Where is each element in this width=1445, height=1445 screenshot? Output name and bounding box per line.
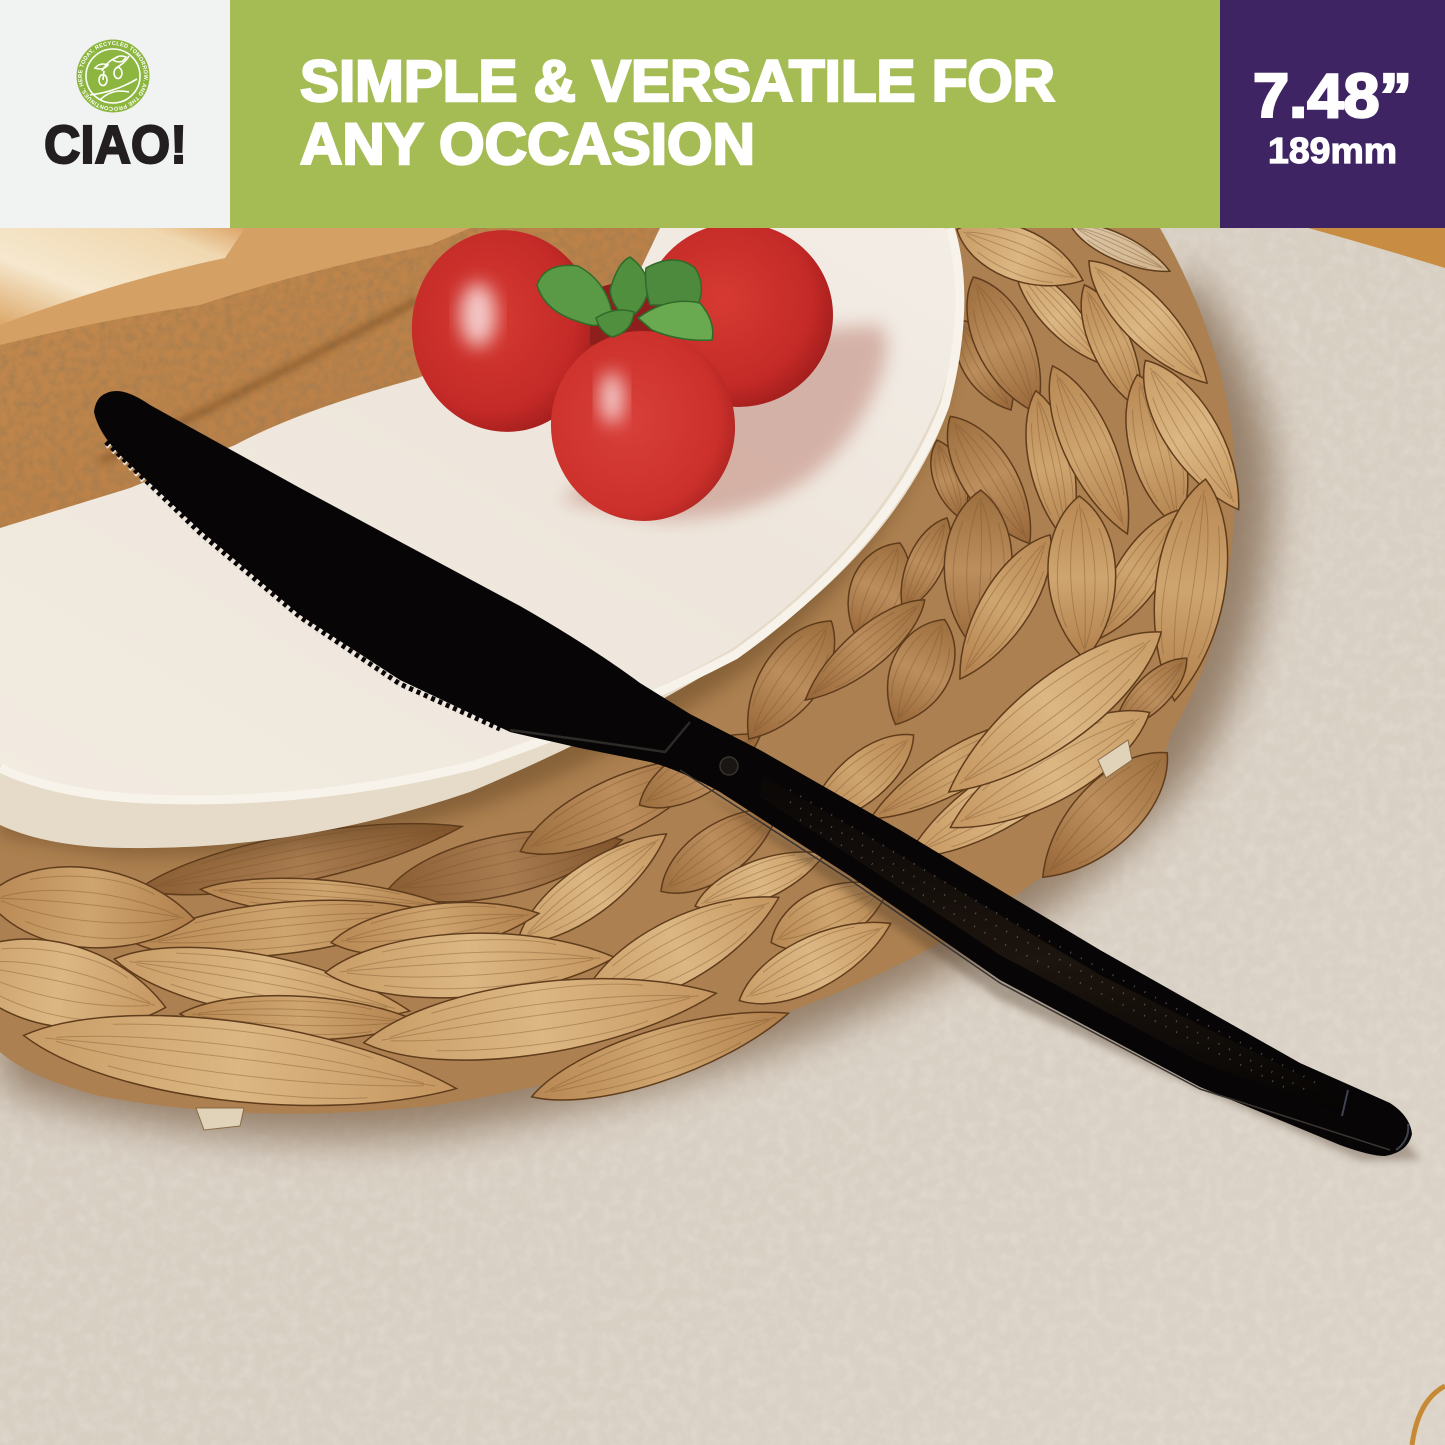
- logo wordmark: CIAO!: [44, 115, 187, 175]
- tomato gap shade: [590, 270, 660, 345]
- handle rivet: [720, 757, 738, 775]
- bottom braid strands: [0, 714, 902, 1128]
- bread body: [0, 228, 660, 528]
- plate lip: [0, 228, 960, 800]
- knife blade and handle: [94, 391, 1412, 1156]
- heading text: ANY OCCASION: [300, 112, 755, 177]
- bread cream crumb: [0, 228, 245, 325]
- tomato highlight left: [460, 283, 496, 347]
- plate: [0, 228, 962, 855]
- loose fibre knots: [196, 740, 1132, 1130]
- handle grip panel: [760, 775, 1346, 1115]
- size millimetres: 189mm: [1268, 130, 1397, 171]
- heading text: [300, 49, 1055, 177]
- serrated edge highlight: [108, 444, 502, 730]
- cherry tomatoes: [399, 218, 833, 533]
- mint leaves: [537, 257, 713, 340]
- tomato front: [539, 319, 747, 533]
- tomato back right: [643, 223, 833, 407]
- serration teeth: [106, 442, 500, 729]
- woven placemat: [0, 206, 1261, 1130]
- gold ring corner: [1412, 1386, 1445, 1445]
- logo badge: [76, 40, 150, 112]
- plate top surface: [0, 228, 957, 797]
- bread top crust: [0, 228, 470, 345]
- size inches: 7.48”: [1253, 62, 1412, 131]
- bread slices: [0, 228, 660, 528]
- heading text: SIMPLE & VERSATILE FOR: [300, 49, 1055, 114]
- tomato shadow on plate: [560, 325, 887, 520]
- placemat shadow: [0, 270, 1274, 1139]
- tomato left: [399, 218, 611, 444]
- placemat base: [0, 228, 1235, 1114]
- handle end highlight: [1342, 1090, 1408, 1150]
- knife: [94, 391, 1420, 1160]
- plate shadow: [0, 300, 960, 855]
- knife shadow: [700, 790, 1420, 1160]
- tomato highlight front: [600, 372, 624, 424]
- logo panel: [0, 0, 230, 228]
- heading banner: [230, 0, 1220, 228]
- handle grip sparkle: [790, 790, 1320, 1092]
- size panel: [1220, 0, 1445, 228]
- handle lower highlight: [680, 770, 1390, 1150]
- right braid strands: [724, 206, 1261, 900]
- blade-handle bolster: [510, 722, 690, 752]
- wooden board corner: [1308, 228, 1445, 268]
- plate rim side: [0, 228, 962, 848]
- bread seam: [100, 300, 418, 462]
